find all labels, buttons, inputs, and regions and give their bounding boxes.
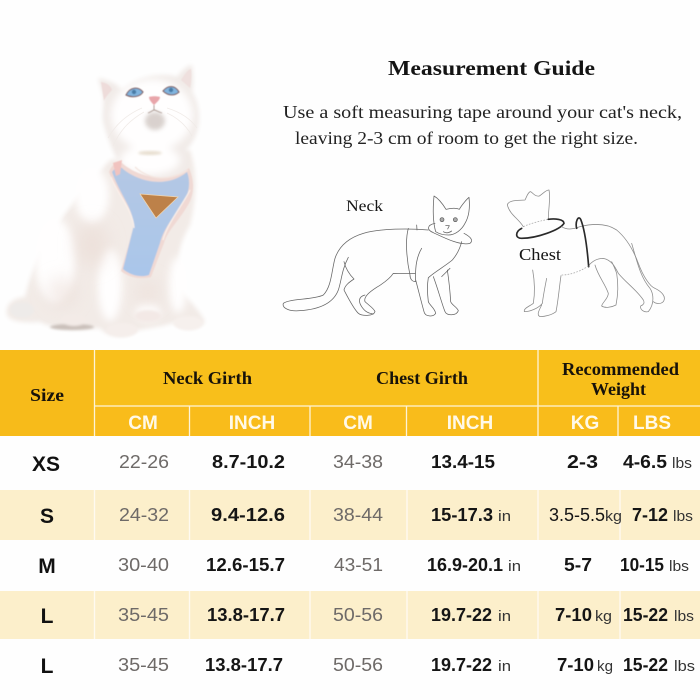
unit headers: INCH <box>229 413 275 434</box>
cat line drawing, side view <box>283 196 472 316</box>
label: Neck: Neck <box>346 198 383 215</box>
row: S: lbs <box>673 508 693 525</box>
instructions text <box>283 102 682 148</box>
label: Chest: Chest <box>519 245 561 264</box>
header: Chest Girth: Chest Girth <box>376 368 468 388</box>
row: S: kg <box>605 508 622 525</box>
row: L: 35-45 <box>118 605 169 625</box>
row: L (repeated): 15-22 <box>623 654 668 675</box>
cat head <box>98 65 199 182</box>
row: L (repeated): kg <box>597 658 613 675</box>
collar shadow <box>138 151 162 155</box>
row: M: 16.9-20.1 <box>427 554 503 575</box>
row: L: kg <box>595 608 612 625</box>
row: XS: XS <box>32 453 60 476</box>
header: Recommended Weight: Recommended <box>562 359 679 379</box>
row: L (repeated) <box>0 639 700 700</box>
row: S: 9.4-12.6 <box>211 504 285 525</box>
cat body <box>7 150 205 336</box>
white fur highlights <box>35 167 187 321</box>
harness <box>109 160 193 278</box>
row: M: 10-15 <box>620 554 664 575</box>
row: L (repeated): L <box>41 655 54 678</box>
instructions text: Use a soft measuring tape around your cat's neck, <box>283 102 682 122</box>
row: S: 38-44 <box>333 505 383 525</box>
row: L: 19.7-22 <box>431 604 492 625</box>
row: L (repeated): 35-45 <box>118 655 169 675</box>
fluffy chin shading <box>145 112 165 130</box>
row: L (repeated): 50-56 <box>333 655 383 675</box>
row: XS: 4-6.5 <box>623 451 667 472</box>
row: L: in <box>498 608 511 625</box>
row: S: 7-12 <box>632 504 668 525</box>
row: M: 30-40 <box>118 555 169 575</box>
unit headers <box>128 413 671 434</box>
row: XS: 8.7-10.2 <box>212 451 285 472</box>
row: L <box>0 591 700 639</box>
size table <box>0 350 700 700</box>
row: L: 7-10 <box>555 604 592 625</box>
row: S: in <box>498 508 511 525</box>
header: Size: Size <box>30 385 64 405</box>
ground shadow and paws <box>10 302 203 337</box>
row: L (repeated): 19.7-22 <box>431 654 492 675</box>
row: L (repeated): in <box>498 658 511 675</box>
row: M <box>0 540 700 591</box>
header: Recommended Weight: Weight <box>591 379 646 399</box>
title: Measurement Guide <box>388 56 595 80</box>
row: XS <box>0 436 700 490</box>
diagram: neck measurement <box>283 196 472 316</box>
row: L (repeated): lbs <box>674 658 695 675</box>
instructions text: leaving 2-3 cm of room to get the right size. <box>295 128 638 148</box>
photo: white cat wearing blue harness <box>7 65 205 337</box>
row: S: S <box>40 505 54 528</box>
row: L: L <box>41 605 54 628</box>
row: S <box>0 490 700 540</box>
unit headers: LBS <box>633 413 671 434</box>
row: XS: 34-38 <box>333 452 383 472</box>
row: M: M <box>38 555 56 578</box>
row: L (repeated): 13.8-17.7 <box>205 654 283 675</box>
unit headers: CM <box>128 413 158 434</box>
row: M: lbs <box>669 558 689 575</box>
row: XS: 22-26 <box>119 452 169 472</box>
eyes <box>126 87 179 97</box>
row: M: in <box>508 558 521 575</box>
row: L: 50-56 <box>333 605 383 625</box>
row: S: 24-32 <box>119 505 169 525</box>
row: XS: 13.4-15 <box>431 451 495 472</box>
row: L: lbs <box>674 608 694 625</box>
header: Recommended Weight <box>562 359 679 399</box>
row: S: 3.5-5.5 <box>549 504 605 525</box>
leather label <box>140 194 178 218</box>
row: M: 12.6-15.7 <box>206 554 285 575</box>
diagram: chest measurement <box>507 190 664 317</box>
row: L (repeated): 7-10 <box>557 654 594 675</box>
row: S: 15-17.3 <box>431 504 493 525</box>
row: M: 5-7 <box>564 554 592 575</box>
header: Neck Girth: Neck Girth <box>163 368 252 388</box>
table header <box>0 350 700 436</box>
cat line drawing, front view <box>507 190 664 317</box>
row: XS: lbs <box>672 455 692 472</box>
whiskers <box>108 108 197 146</box>
unit headers: INCH <box>447 413 493 434</box>
row: L: 13.8-17.7 <box>207 604 285 625</box>
unit headers: KG <box>571 413 599 434</box>
unit headers: CM <box>343 413 373 434</box>
row: XS: 2-3 <box>567 451 598 472</box>
nose and mouth <box>148 96 162 113</box>
row: M: 43-51 <box>334 555 383 575</box>
fur shading <box>48 223 158 306</box>
row: L: 15-22 <box>623 604 668 625</box>
